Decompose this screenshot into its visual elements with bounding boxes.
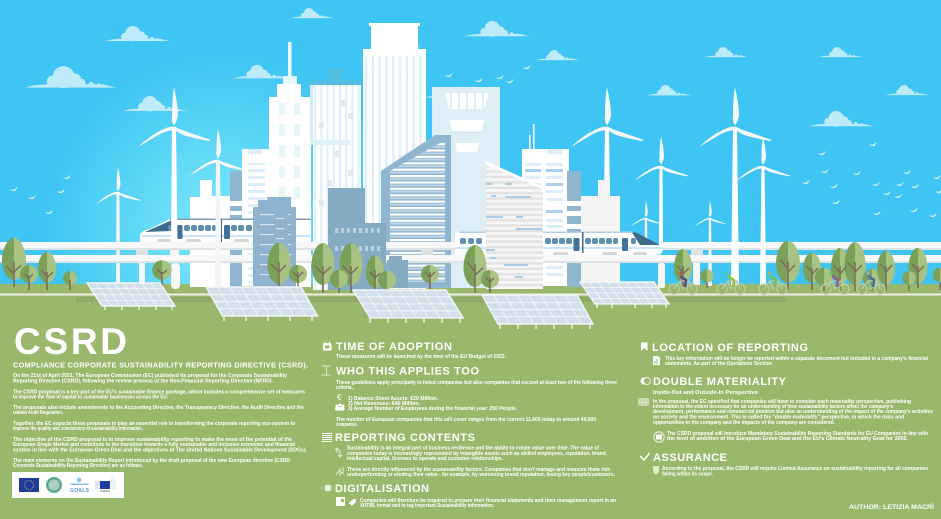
text block: introduction (13, 373, 307, 469)
section: time of adoption: TIME OF ADOPTION (336, 341, 452, 353)
icon: check mark (640, 453, 650, 460)
striped white building (486, 161, 543, 289)
city buildings, back row (190, 23, 620, 290)
birds over the towers (361, 45, 499, 118)
section: double materiality: information to the extent necessary for an understanding of how sustainability factors affect the company's (653, 404, 893, 410)
icon: list (322, 434, 332, 442)
section: reporting contents: underperforming or eroding their value - for example, by worsening brand reputation, losing key people/customers. (347, 472, 615, 478)
icon: euro: € (337, 393, 342, 402)
icon: growth arrows (335, 448, 342, 457)
icon: building column (322, 366, 331, 375)
section: time of adoption: These measures will be launched by the time of the EU Budget of 2023. (336, 354, 506, 360)
text block: introduction: Reporting Directive (CSRD), following the review process of the Non-Financial Reporting Directive (NFRD). (13, 378, 273, 384)
section: assurance: falling within its scope. (662, 472, 713, 478)
icon: bookmark (641, 342, 648, 351)
section: location of reporting (641, 342, 928, 367)
section: reporting contents: These are directly influenced by the sustainability factors. Companies that don't manage and measure them risk (347, 467, 610, 473)
section: who this applies too: WHO THIS APPLIES TOO (336, 366, 479, 378)
icon: report document (653, 356, 660, 365)
angled blue building (381, 135, 451, 288)
section: assurance (640, 452, 928, 478)
icon: table grid (638, 398, 649, 406)
section: who this applies too: 3) Average Number of Employees during the financial year: 250 People. (348, 406, 517, 412)
background sky (0, 0, 941, 300)
section: double materiality: DOUBLE MATERIALITY (653, 376, 787, 388)
text block: introduction: European Single Market and contribute to the transition towards a fully sustainable and inclusive economic and financial (13, 442, 295, 448)
logos strip (12, 472, 124, 498)
section: who this applies too: companies. (336, 422, 358, 428)
text block: introduction: to improve the flow of capital to sustainable businesses across the EU. (13, 394, 168, 400)
icon: decline arrows (336, 467, 343, 476)
section: digitalisation: DIGITALISATION (335, 483, 429, 495)
high-speed train on lower bridge (455, 232, 663, 255)
icon: digital chip (322, 482, 334, 494)
section: who this applies too: criteria.. (336, 385, 354, 391)
icon: circled standards (654, 432, 664, 442)
section: double materiality (638, 376, 933, 442)
icon: shield (653, 466, 659, 474)
icon: tag (349, 499, 356, 506)
logos strip: GOALS (70, 488, 90, 494)
far wind turbines (96, 87, 726, 286)
text block: introduction: The main elements on the Sustainability Report introduced by the draft proposal of the new European directive (CSRD (13, 458, 290, 464)
section: double materiality: on society and the environment. This is called the "double materiality" perspective, in which the risks and (653, 414, 904, 420)
section: location of reporting: statements. As part of the Operations Section. (665, 361, 773, 367)
birds (10, 65, 941, 217)
section: who this applies too: 1) Balance Sheet Assets: €20 Million. (348, 396, 438, 402)
section: location of reporting: LOCATION OF REPORTING (652, 342, 808, 354)
text block: introduction: The CSRD proposal is a key part of the EU's sustainable finance package, which includes a comprehensive set of measures (13, 389, 305, 395)
high-speed train on upper bridge (140, 218, 311, 243)
front wind turbines (138, 87, 790, 287)
text block: introduction: The objective of the CSRD proposal is to improve sustainability reporting to make the most of the potential of the (13, 437, 292, 443)
text block: introduction: Corporate Sustainability Reporting Directive) are as follows. (13, 463, 143, 469)
text block: introduction: related Audit Regulation. (13, 410, 63, 416)
section: assurance: ASSURANCE (653, 452, 727, 464)
subtitle: COMPLIANCE CORPORATE SUSTAINABILITY REPORTING DIRECTIVE (CSRD). (13, 360, 308, 370)
section: reporting contents (322, 432, 615, 478)
icon: double circles (640, 378, 650, 384)
solar panels (87, 282, 669, 329)
section: reporting contents: companies today is increasingly represented by intangible assets such as skilled employees, reputation, brand, (347, 451, 607, 457)
section: digitalisation (322, 482, 616, 509)
section: reporting contents: intellectual capital, licenses to operate and customer relationships. (347, 456, 503, 462)
section: double materiality: opportunities to the company and the impacts of the company are considered. (653, 420, 835, 426)
section: who this applies too: The number of European companies that this will cover ranges from the current 11,600 today to around 49,000 (336, 417, 596, 423)
logos strip: SUSTAINABLE DEVELOPMENT (70, 483, 90, 486)
text block: introduction: improve the quality and consistency of sustainability information. (13, 426, 143, 432)
section: time of adoption (323, 341, 506, 360)
text block: introduction: The proposals also include amendments to the Accounting Directive, the Transparency Directive, the Audit Directive and the (13, 405, 304, 411)
section: who this applies too: 2) Net Revenues: €40 Million. (348, 401, 420, 407)
front blue buildings (253, 188, 408, 290)
section: reporting contents: Sustainability is an integral part of business resilience and the ability to create value over time. The value of (347, 446, 599, 452)
text block: introduction: On the 21st of April 2021, The European Commission (EC) published its proposal for the Corporate Sustainability (13, 373, 287, 379)
section: digitalisation: Companies will therefore be required to prepare their financial statements and their management report in an (360, 498, 616, 504)
icon: calendar (323, 342, 332, 350)
clouds (25, 8, 929, 127)
section: who this applies too: These guidelines apply principally to listed companies but also companies that exceed at least two of the following three (336, 380, 617, 386)
section: digitalisation: XHTML format and to tag important Sustainability information. (360, 503, 494, 509)
section: who this applies too (322, 366, 617, 428)
trees (2, 238, 941, 293)
icon: document (336, 497, 345, 506)
section: double materiality: In the proposal, the EC specified that companies will have to consider each materiality perspective, publishing (653, 399, 911, 405)
elevated rail bridges (0, 242, 941, 289)
cyclists (669, 272, 885, 294)
section: double materiality: the level of ambition of the European Green Deal and the EU's Climate Neutrality Goal for 2050. (667, 436, 908, 442)
section: double materiality: Inside-Out and Outside-In Perspective (653, 390, 758, 396)
text block: introduction: system in line with the European Green Deal and the objectives of The United Nations Sustainable Development (SDGs). (13, 447, 307, 453)
icon: people (335, 404, 344, 410)
text block: introduction: Together, the EC expects these proposals to play an essential role in transforming the corporate reporting eco-system to (13, 421, 296, 427)
author credit: AUTHOR: LETIZIA MACRÌ (849, 502, 934, 511)
ground shadow and cycle path (0, 294, 941, 302)
ground (0, 284, 941, 519)
section: reporting contents: REPORTING CONTENTS (335, 432, 475, 444)
title: CSRD: CSRD (14, 321, 127, 362)
